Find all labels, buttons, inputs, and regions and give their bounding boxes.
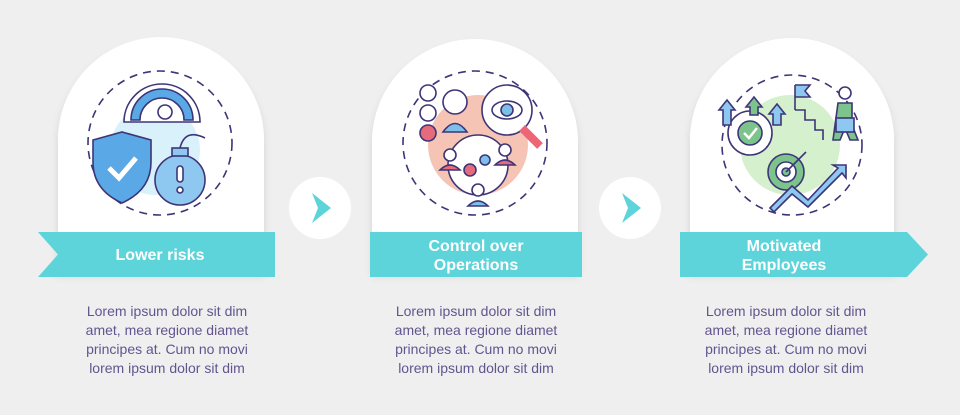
- panel: control over operations: [372, 39, 578, 270]
- banner: motivated employees: [680, 232, 928, 277]
- text: lower risks: Lorem ipsum dolor sit dim: [87, 303, 247, 319]
- text: control over operations: amet, mea regione diamet: [395, 322, 557, 338]
- icon: team control: [403, 71, 547, 215]
- text: control over operations: [395, 303, 558, 376]
- arrow 2: [599, 177, 661, 239]
- text: lower risks: [86, 303, 248, 376]
- banner: control over operations: Operations: [434, 257, 518, 274]
- banner: motivated employees: Motivated: [747, 238, 821, 255]
- text: control over operations: lorem ipsum dolor sit dim: [398, 360, 554, 376]
- banner: lower risks: [38, 232, 275, 277]
- text: motivated employees: lorem ipsum dolor sit dim: [708, 360, 864, 376]
- text: motivated employees: Lorem ipsum dolor sit dim: [706, 303, 866, 319]
- text: motivated employees: amet, mea regione diamet: [705, 322, 867, 338]
- banner: control over operations: [370, 232, 582, 277]
- text: lower risks: amet, mea regione diamet: [86, 322, 248, 338]
- text: control over operations: Lorem ipsum dolor sit dim: [396, 303, 556, 319]
- banner: lower risks: Lower risks: [116, 247, 205, 264]
- arrow 1: [289, 177, 351, 239]
- text: lower risks: lorem ipsum dolor sit dim: [89, 360, 245, 376]
- text: lower risks: principes at. Cum no movi: [86, 341, 248, 357]
- panel: motivated employees: [690, 38, 894, 270]
- panel: lower risks: [58, 37, 264, 270]
- text: control over operations: principes at. Cum no movi: [395, 341, 557, 357]
- icon: growth: [719, 75, 862, 215]
- banner: control over operations: Control over: [428, 238, 524, 255]
- banner: motivated employees: Employees: [742, 257, 826, 274]
- text: motivated employees: principes at. Cum no movi: [705, 341, 867, 357]
- icon: gauge shield bomb: [88, 71, 232, 215]
- text: motivated employees: [705, 303, 868, 376]
